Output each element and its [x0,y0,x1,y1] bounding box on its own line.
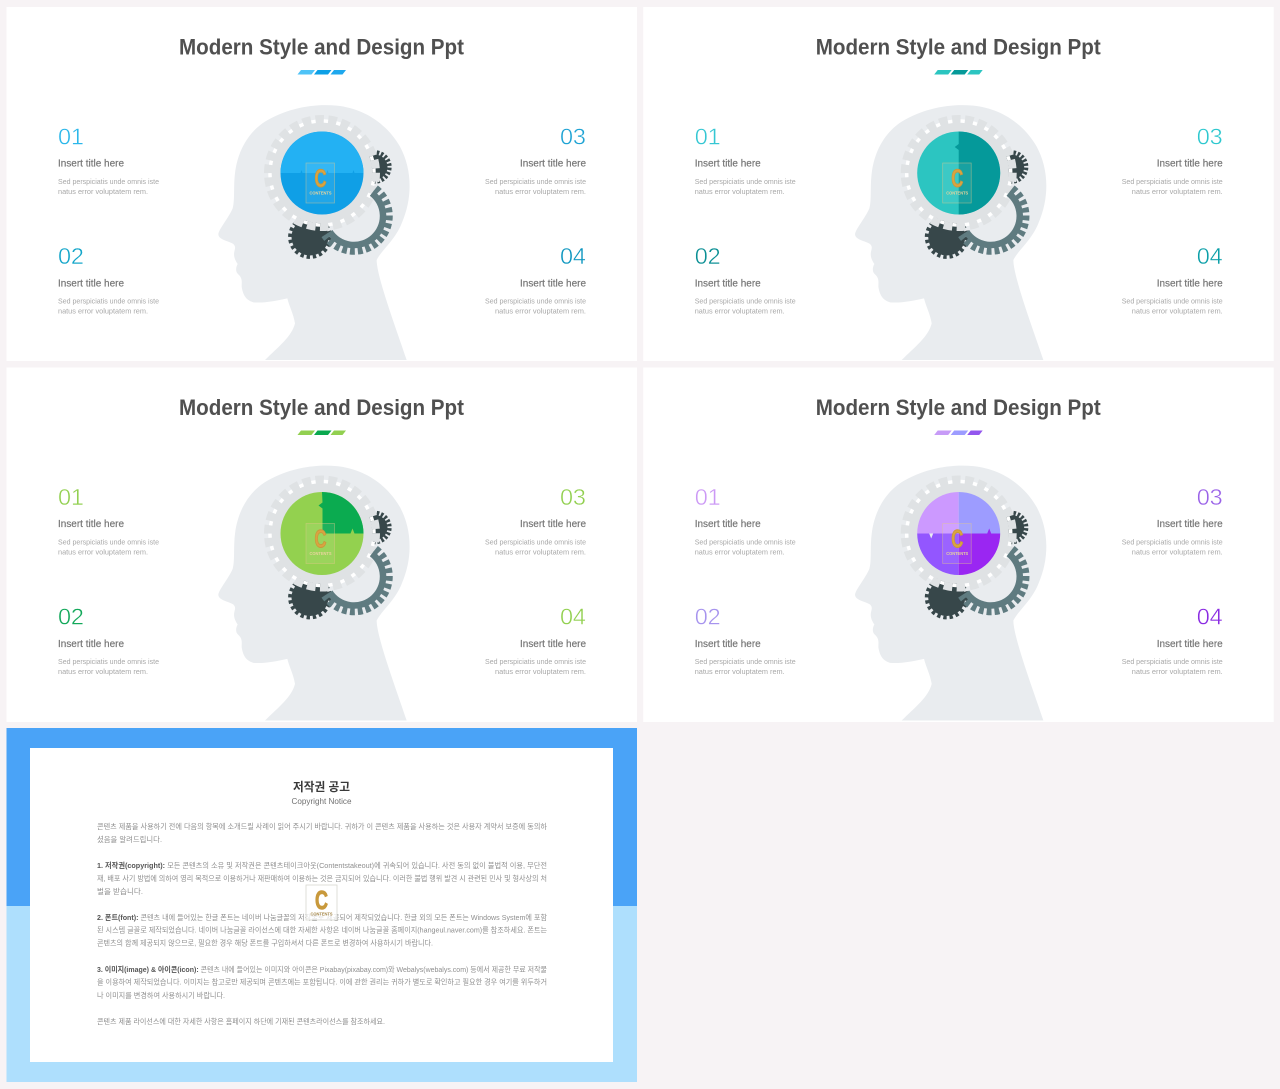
item 04 [485,243,586,316]
notice section 3: 을 이용하여 제작되었습니다. 이미지는 참고로만 제공되며 콘텐츠에는 포함됩니다. 이에 관한 권리는 귀하가 별도로 확인하고 필요한 경우 여기를 위두하거 [97,976,547,986]
notice section 2: 된 시스템 글꼴로 제작되었습니다. 네이버 나눔글꼴 라이선스에 대한 자세한 사항은 네이버 나눔글꼴 홈페이지(hangeul.naver.com)를 참조하세요. 폰트는 [97,924,547,934]
item 04 [1122,604,1223,676]
notice section 1 [97,860,547,896]
item 02: Sed perspiciatis unde omnis iste [58,296,159,306]
notice footer line: 콘텐츠 제품 라이선스에 대한 자세한 사항은 홈페이지 하단에 기재된 콘텐츠라이선스를 참조하세요. [97,1016,385,1026]
item 02: natus error voluptatem rem. [58,667,148,676]
item 04: 04 [560,243,586,269]
item 04 [485,604,586,676]
logo [943,163,971,203]
item 01: natus error voluptatem rem. [58,187,148,196]
notice section 3: 나 이미지를 변경하여 사용하시기 바랍니다. [97,990,225,1000]
item 03 [1122,484,1223,556]
item 03: natus error voluptatem rem. [495,548,586,556]
item 03: 03 [560,484,586,510]
item 02: 02 [58,604,84,630]
item 04: Insert title here [520,639,586,650]
logo: CONTENTS [310,551,332,556]
item 02: Sed perspiciatis unde omnis iste [58,657,159,666]
item 02: Sed perspiciatis unde omnis iste [695,296,796,306]
notice section 2: 콘텐츠의 함께 제공되지 않으므로, 필요한 경우 해당 폰트를 구입하셔서 다른 폰트로 변경하여 사용하시기 바랍니다. [97,938,433,948]
watermark logo: C [315,885,328,915]
brain disc [280,492,364,575]
item 04: natus error voluptatem rem. [495,667,586,676]
notice section 2 [97,912,547,948]
watermark logo: CONTENTS [310,912,332,916]
item 03: Insert title here [520,158,586,170]
notice section 1: 벌을 받습니다. [97,886,143,896]
brain disc [917,492,1000,575]
item 01: Sed perspiciatis unde omnis iste [58,538,159,546]
item 03: natus error voluptatem rem. [1132,187,1223,196]
item 04: Insert title here [1157,278,1223,290]
item 01: Sed perspiciatis unde omnis iste [695,177,796,186]
notice section 2: 2. 폰트(font): 콘텐츠 내에 들어있는 한글 폰트는 네이버 나눔글꼴의 저작물로 제공되어 제작되었습니다. 한글 외의 모든 폰트는 Windows System에 포함 [97,912,547,922]
item 02: Insert title here [58,639,124,650]
watermark logo [306,885,337,920]
item 01 [695,124,796,196]
item 04: Insert title here [1157,639,1223,650]
item 01: Insert title here [695,158,761,170]
item 01: 01 [695,484,721,510]
notice section 3: 3. 이미지(image) & 아이콘(icon): 콘텐츠 내에 들어있는 이미지와 아이콘은 Pixabay(pixabay.com)와 Webalys(webalys.com) 등에서 제공한 무료 저작물 [97,964,547,974]
logo: CONTENTS [310,190,332,196]
title: Modern Style and Design Ppt [179,34,465,60]
item 02: natus error voluptatem rem. [695,667,785,676]
item 01 [695,484,796,556]
item 04: Sed perspiciatis unde omnis iste [1122,296,1223,306]
notice section 1: 재, 배포 사기 방법에 의하여 영리 목적으로 이용하거나 재판매하여 이용하는 것은 금지되어 있습니다. 이러한 불법 행위 발견 시 관련된 민사 및 형사상의 처 [97,873,547,883]
item 03: Sed perspiciatis unde omnis iste [1122,538,1223,546]
item 03: Sed perspiciatis unde omnis iste [1122,177,1223,186]
item 03: Sed perspiciatis unde omnis iste [485,538,586,546]
item 04: 04 [1197,243,1223,269]
item 04: Sed perspiciatis unde omnis iste [1122,657,1223,666]
item 04: Sed perspiciatis unde omnis iste [485,657,586,666]
item 01: 01 [58,484,84,510]
brain disc [280,131,364,214]
item 03 [1122,124,1223,196]
logo: C [951,526,963,554]
item 04 [1122,243,1223,316]
item 02: 02 [695,243,721,269]
item 04: Insert title here [520,278,586,290]
logo: CONTENTS [946,551,968,556]
head with gears [855,105,1046,360]
logo [306,524,334,564]
notice heading: 저작권 공고 [293,779,350,794]
item 01: natus error voluptatem rem. [695,187,785,196]
item 02: Insert title here [695,639,761,650]
item 03: 03 [560,124,586,150]
item 03: 03 [1197,124,1223,150]
item 01 [58,124,159,196]
item 01: natus error voluptatem rem. [695,548,785,556]
item 03: Insert title here [1157,519,1223,530]
item 01: Insert title here [58,158,124,170]
logo [306,163,334,203]
title: Modern Style and Design Ppt [816,395,1101,420]
notice section 3 [97,964,547,1000]
item 01: Insert title here [695,519,761,530]
panel: purple slide [643,368,1274,722]
notice heading: Copyright Notice [292,796,352,806]
title: Modern Style and Design Ppt [816,34,1101,60]
notice heading [292,779,352,806]
head with gears [218,466,410,720]
item 03: natus error voluptatem rem. [1132,548,1223,556]
item 01: Sed perspiciatis unde omnis iste [695,538,796,546]
item 03: natus error voluptatem rem. [495,187,586,196]
item 04: natus error voluptatem rem. [495,306,586,316]
item 03: Insert title here [1157,158,1223,170]
item 01: 01 [58,124,84,150]
item 02: Insert title here [695,278,761,290]
head with gears [218,105,410,360]
panel: green slide [6,368,637,722]
title accent dashes [934,430,983,435]
panel: teal slide [643,7,1274,361]
item 01: 01 [695,124,721,150]
item 02: 02 [695,604,721,630]
logo: C [951,165,963,193]
head with gears [855,466,1046,720]
logo: C [314,526,326,554]
item 01: Insert title here [58,519,124,530]
panel: copyright notice [6,728,637,1082]
notice intro: 셨음을 알려드립니다. [97,834,162,844]
notice intro [97,821,547,844]
notice section 1: 1. 저작권(copyright): 모든 콘텐츠의 소유 및 저작권은 콘텐츠테이크아웃(Contentstakeout)에 귀속되어 있습니다. 사전 동의 없이 불법적 이용, 무단전 [97,860,547,870]
item 01: natus error voluptatem rem. [58,548,148,556]
item 04: 04 [560,604,586,630]
title accent dashes [934,70,983,74]
item 02: 02 [58,243,84,269]
item 01 [58,484,159,556]
title accent dashes [298,70,346,74]
item 04: natus error voluptatem rem. [1132,306,1223,316]
item 04: natus error voluptatem rem. [1132,667,1223,676]
title: Modern Style and Design Ppt [179,395,465,420]
logo [943,524,971,564]
item 03 [485,124,586,196]
panel: blue slide [6,7,637,361]
item 03: Insert title here [520,519,586,530]
title accent dashes [298,430,346,435]
item 02: natus error voluptatem rem. [695,306,785,316]
brain disc [917,132,1000,214]
item 04: 04 [1197,604,1223,630]
item 02 [695,604,796,676]
logo: CONTENTS [946,190,968,196]
item 04: Sed perspiciatis unde omnis iste [485,296,586,306]
item 03: 03 [1197,484,1223,510]
item 01: Sed perspiciatis unde omnis iste [58,177,159,186]
item 02: Insert title here [58,278,124,290]
logo: C [314,165,326,193]
item 02 [695,243,796,316]
item 02: natus error voluptatem rem. [58,306,148,316]
item 02: Sed perspiciatis unde omnis iste [695,657,796,666]
notice intro: 콘텐츠 제품을 사용하기 전에 다음의 항목에 소개드릴 사례이 읽어 주시기 바랍니다. 귀하가 이 콘텐츠 제품을 사용하는 것은 사용자 계약서 보증에 동의하 [97,821,547,831]
item 03 [485,484,586,556]
item 03: Sed perspiciatis unde omnis iste [485,177,586,186]
item 02 [58,243,159,316]
item 02 [58,604,159,676]
